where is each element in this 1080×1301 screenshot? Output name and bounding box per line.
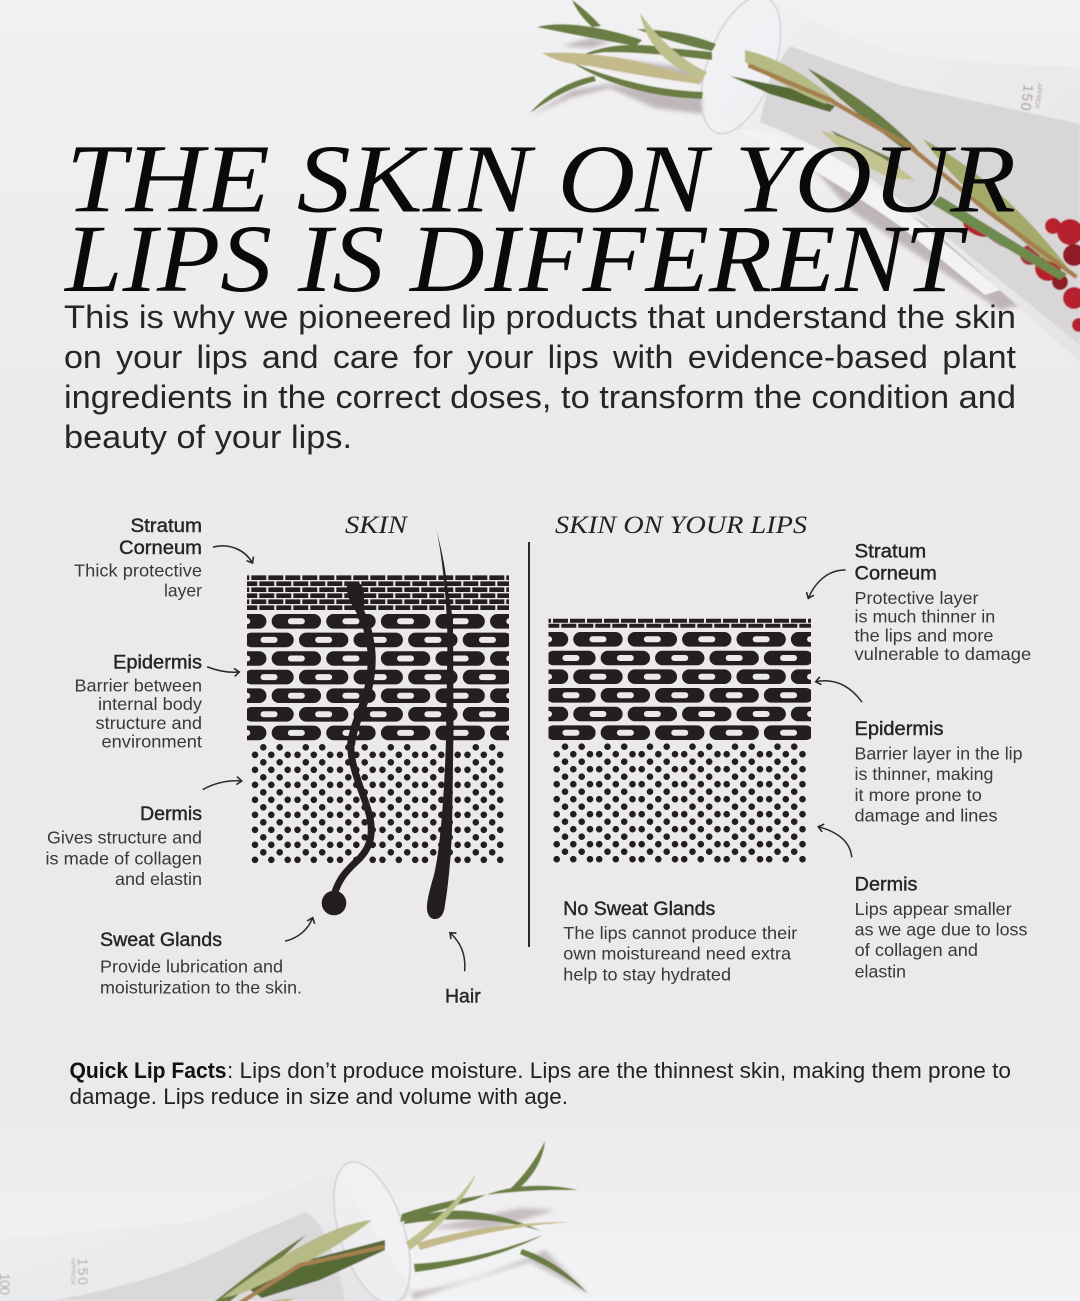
label: dermis (skin): Dermis (140, 804, 202, 825)
rosemary stem (750, 66, 1075, 276)
flask rim (319, 1153, 425, 1301)
label: sweat glands: Provide lubrication and (100, 956, 283, 976)
intro paragraph: beauty of your lips. (64, 419, 352, 455)
sweat gland (322, 582, 372, 915)
leaf shadows (530, 38, 1040, 310)
label: dermis (lips): Lips appear smaller (855, 899, 1012, 919)
label: stratum corneum (lips): the lips and more (854, 626, 994, 646)
stratum corneum layer (234, 578, 520, 608)
label: stratum corneum (skin): layer (164, 581, 202, 601)
label: dermis (skin): and elastin (115, 869, 202, 889)
label: epidermis (skin): structure and (96, 713, 202, 733)
rosemary leaves (187, 1141, 587, 1301)
label: dermis (skin): Gives structure and (47, 827, 202, 847)
flask inner grey (0, 1212, 345, 1301)
arrow: epidermis (lips) (816, 681, 862, 702)
label: epidermis (lips): Epidermis (854, 719, 944, 740)
label: no sweat glands: help to stay hydrated (563, 965, 731, 985)
label: stratum corneum (lips): Stratum (854, 541, 926, 562)
beaker marking (0, 1258, 91, 1295)
label: dermis (skin) (46, 804, 202, 889)
title (63, 126, 1016, 312)
label: epidermis (lips): damage and lines (854, 806, 998, 826)
arrow: dermis (lips) (818, 827, 852, 857)
title: THE SKIN ON YOUR (66, 126, 1016, 233)
arrow: hair (450, 933, 465, 971)
divider (528, 542, 530, 947)
label: hair: Hair (445, 986, 481, 1007)
label: no sweat glands: own moistureand need extra (563, 943, 791, 963)
label: dermis (lips): elastin (855, 961, 906, 981)
beaker marking: APPROX (69, 1258, 76, 1286)
heading: skin: SKIN (345, 512, 409, 539)
label: no sweat glands: No Sweat Glands (563, 899, 715, 920)
epidermis layer (247, 614, 509, 740)
arrow: epidermis (skin) (208, 667, 239, 672)
label: stratum corneum (lips): Corneum (854, 563, 937, 584)
intro paragraph: ingredients in the correct doses, to transform the condition and (64, 379, 1016, 415)
label: stratum corneum (skin) (74, 516, 202, 601)
label: stratum corneum (skin): Stratum (130, 516, 202, 537)
intro paragraph: on your lips and care for your lips with evidence-based plant (64, 339, 1016, 375)
beaker marking: APPROX (1033, 83, 1043, 110)
flask body (716, 0, 1080, 362)
intro paragraph (64, 299, 1016, 455)
dermis layer (557, 747, 804, 859)
label: no sweat glands: The lips cannot produce their (563, 923, 797, 943)
intro paragraph: This is why we pioneered lip products that understand the skin (64, 299, 1016, 335)
label: stratum corneum (skin): Corneum (119, 538, 202, 559)
label: epidermis (skin): Epidermis (113, 652, 202, 673)
label: epidermis (lips): Barrier layer in the lip (854, 743, 1022, 763)
flask body (0, 1168, 412, 1301)
beaker marking: 150 (1018, 84, 1037, 112)
label: epidermis (skin) (74, 652, 202, 752)
title: LIPS IS DIFFERENT (63, 205, 969, 312)
label: dermis (lips): of collagen and (855, 940, 978, 960)
quick lip facts: Quick Lip Facts (70, 1058, 226, 1083)
leaf shadows (280, 1208, 590, 1301)
label: epidermis (lips): it more prone to (854, 785, 982, 805)
label: dermis (lips): as we age due to loss (855, 920, 1028, 940)
epidermis layer (499, 639, 830, 733)
label: dermis (lips) (855, 875, 1028, 981)
label: stratum corneum (skin): Thick protective (74, 561, 202, 581)
quick lip facts: damage. Lips reduce in size and volume with age. (70, 1084, 568, 1109)
label: sweat glands: Sweat Glands (100, 930, 222, 951)
label: epidermis (skin): environment (102, 732, 202, 752)
label: epidermis (lips) (854, 719, 1022, 826)
label: stratum corneum (lips): vulnerable to damage (854, 644, 1031, 664)
rosemary stem (205, 1247, 383, 1301)
label: stratum corneum (lips) (854, 541, 1031, 664)
flask rim (685, 0, 797, 144)
label: epidermis (lips): is thinner, making (854, 764, 994, 784)
label: no sweat glands (563, 899, 797, 985)
heading: skin on your lips: SKIN ON YOUR LIPS (555, 512, 808, 539)
arrow: sweat glands (286, 918, 313, 941)
arrow: stratum corneum (lips) (808, 570, 845, 598)
label: stratum corneum (lips): Protective layer (854, 588, 979, 608)
photo: flask and rosemary top right (530, 0, 1080, 362)
label: sweat glands (100, 930, 302, 997)
label: sweat glands: moisturization to the skin. (100, 977, 302, 997)
label: epidermis (skin): internal body (98, 694, 202, 714)
beaker marking: 150 (75, 1258, 91, 1285)
hair (427, 530, 454, 919)
diagram: skin cross-section (247, 530, 509, 919)
arrow: stratum corneum (skin) (214, 546, 252, 563)
label: epidermis (skin): Barrier between (74, 676, 202, 696)
label: dermis (skin): is made of collagen (46, 849, 202, 869)
quick lip facts (70, 1058, 1011, 1109)
diagram: lip skin cross-section (548, 618, 811, 862)
arrow: dermis (skin) (203, 781, 242, 789)
rosemary leaves (530, 0, 1067, 280)
photo: flask and rosemary bottom (0, 1141, 590, 1301)
label: dermis (lips): Dermis (855, 875, 917, 896)
stratum corneum layer (536, 621, 830, 626)
flask inner grey (760, 46, 1080, 345)
dermis layer (255, 747, 505, 860)
pomegranate seeds (960, 215, 1080, 332)
quick lip facts: : Lips don’t produce moisture. Lips are the thinnest skin, making them prone to (227, 1058, 1011, 1083)
label: stratum corneum (lips): is much thinner in (854, 607, 995, 627)
